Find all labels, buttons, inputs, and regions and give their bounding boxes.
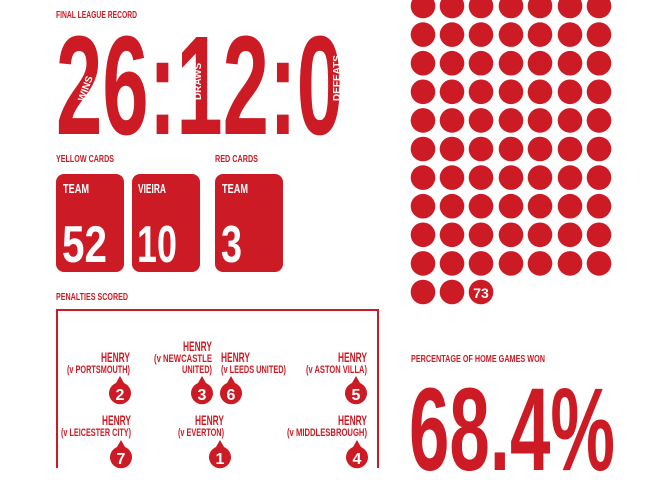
heading: final league record: FINAL LEAGUE RECORD [56,10,137,21]
card: team yellow [56,174,124,274]
penalty 1: HENRY [195,412,224,428]
penalty 2 [67,349,131,404]
penalty 3: UNITED) [182,364,212,376]
penalty 6: (v LEEDS UNITED) [221,364,286,376]
penalty 4: (v MIDDLESBROUGH) [287,427,367,439]
card: team yellow: TEAM [63,181,89,196]
penalty 5: (v ASTON VILLA) [306,364,367,376]
penalty 1 [178,412,231,468]
penalties [61,338,368,468]
dot chart: 73 points [411,0,611,304]
penalty 2: (v PORTSMOUTH) [67,364,130,376]
label: draws: DRAWS [193,62,204,100]
card: vieira yellow: 10 [137,216,177,274]
card: team red [215,174,283,274]
label: wins: WINS [76,74,96,103]
penalty 7: 7 [117,451,126,468]
penalty 2: HENRY [101,349,130,365]
penalty 3 [154,338,213,404]
penalty 1: 1 [216,451,225,468]
penalty 1: (v EVERTON) [178,427,224,439]
penalty 3: HENRY [183,338,212,354]
heading: penalties scored: PENALTIES SCORED [56,292,128,303]
card: team yellow: 52 [62,216,107,274]
card: vieira yellow: VIEIRA [138,181,166,196]
penalty box outline [57,310,378,468]
penalty 7: HENRY [102,412,131,428]
penalty 4 [287,412,368,468]
dot chart: 73 points: 73 [473,285,489,301]
penalty 7 [61,412,132,468]
penalty 6: HENRY [221,349,250,365]
penalty 5 [306,349,367,404]
card: team red: TEAM [222,181,248,196]
penalty 4: 4 [353,451,362,468]
heading: percentage of home games won: PERCENTAGE OF HOME GAMES WON [411,354,545,365]
penalty 5: HENRY [338,349,367,365]
card: team red: 3 [221,216,242,274]
penalty 7: (v LEICESTER CITY) [61,427,131,439]
penalty 6 [220,349,286,404]
penalty 3: 3 [198,387,207,404]
label: defeats: DEFEATS [332,55,343,101]
heading: red cards: RED CARDS [215,154,258,165]
card: vieira yellow [132,174,200,274]
heading: yellow cards: YELLOW CARDS [56,154,114,165]
penalty 2: 2 [116,387,125,404]
big record numbers: 26:12:0 [56,6,343,164]
penalty 6: 6 [227,387,236,404]
penalty 3: (v NEWCASTLE [154,353,212,365]
penalty 5: 5 [352,387,361,404]
big record numbers [56,6,343,164]
penalty 4: HENRY [338,412,367,428]
